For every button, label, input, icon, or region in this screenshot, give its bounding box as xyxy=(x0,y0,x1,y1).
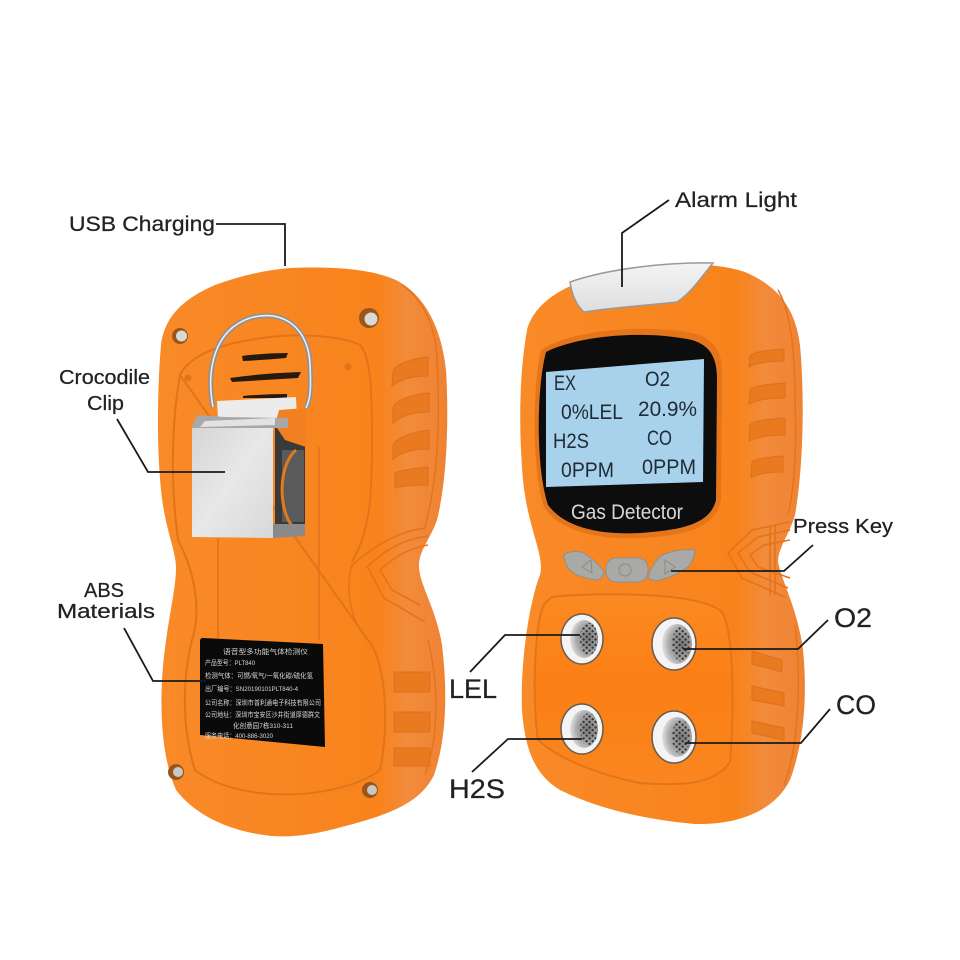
front casing xyxy=(520,264,805,824)
callout: CO: CO xyxy=(836,690,876,720)
label plate: 化创意园7栋310-311 xyxy=(233,721,293,730)
screen bezel: 20.9% xyxy=(638,398,697,421)
label plate: 产品型号：PLT840 xyxy=(205,658,255,667)
speaker slots xyxy=(230,353,301,398)
LCD display xyxy=(546,359,704,487)
callout: Press Key: Press Key xyxy=(793,516,893,538)
callout: Crocodile Clip: Clip xyxy=(87,393,124,415)
callout: Press Key xyxy=(671,516,893,571)
gas sensor LEL xyxy=(561,614,603,664)
label plate: 语音型多功能气体检测仪 xyxy=(223,647,308,656)
gas sensor H2S xyxy=(561,704,603,754)
metal D ring xyxy=(211,316,311,408)
screen bezel xyxy=(535,329,722,538)
label plate: 公司名称：深圳市普利通电子科技有限公司 xyxy=(205,698,321,707)
callout: CO xyxy=(685,690,876,743)
lower sensor panel xyxy=(535,594,733,784)
gas sensor O2 xyxy=(652,618,696,670)
callout: Alarm Light: Alarm Light xyxy=(675,189,797,212)
callout: ABS Materials xyxy=(57,580,206,681)
callout: ABS Materials: ABS xyxy=(84,580,124,602)
press keys xyxy=(563,550,695,582)
side rim line xyxy=(402,285,438,775)
waist chevrons xyxy=(728,522,790,597)
right side ribs xyxy=(749,349,785,740)
callout: Alarm Light xyxy=(622,189,797,287)
callout: LEL xyxy=(449,635,580,704)
device: back view xyxy=(158,268,447,836)
label plate: 服务电话：400-886-3020 xyxy=(205,731,273,740)
screen bezel: CO xyxy=(647,427,672,450)
device brand text: Gas Detector xyxy=(571,501,683,524)
back recessed panel xyxy=(173,335,385,794)
crocodile clip xyxy=(192,397,306,538)
callout: USB Charging: USB Charging xyxy=(69,213,215,236)
alarm light xyxy=(570,263,713,312)
screen bezel: O2 xyxy=(645,368,670,391)
label plate: 出厂编号：SN20190101PLT840-4 xyxy=(205,684,298,693)
screen bezel: H2S xyxy=(553,430,589,453)
gas sensor CO xyxy=(652,711,696,763)
label plate xyxy=(200,638,325,747)
callout: H2S xyxy=(449,739,582,804)
screen bezel: EX xyxy=(554,372,576,395)
callout: Crocodile Clip xyxy=(59,367,225,472)
screen bezel: 0PPM xyxy=(561,459,614,482)
back casing xyxy=(158,268,447,836)
callout: H2S: H2S xyxy=(449,774,505,804)
label plate: 检测气体：可燃/氧气/一氧化碳/硫化氢 xyxy=(205,671,313,680)
callout: LEL: LEL xyxy=(449,674,497,704)
callout: USB Charging xyxy=(69,213,285,266)
side grip ribs xyxy=(392,357,430,766)
screws xyxy=(168,308,379,798)
screen bezel: 0PPM xyxy=(642,456,696,479)
callout: ABS Materials: Materials xyxy=(57,601,155,623)
callout: O2: O2 xyxy=(834,603,872,633)
waist chevrons xyxy=(349,528,428,640)
device: front view xyxy=(520,263,805,824)
screen bezel: 0%LEL xyxy=(561,401,623,424)
callout: Crocodile Clip: Crocodile xyxy=(59,367,150,389)
callout: O2 xyxy=(683,603,872,649)
label plate: 公司地址：深圳市宝安区沙井街道厚德群文 xyxy=(205,710,320,719)
